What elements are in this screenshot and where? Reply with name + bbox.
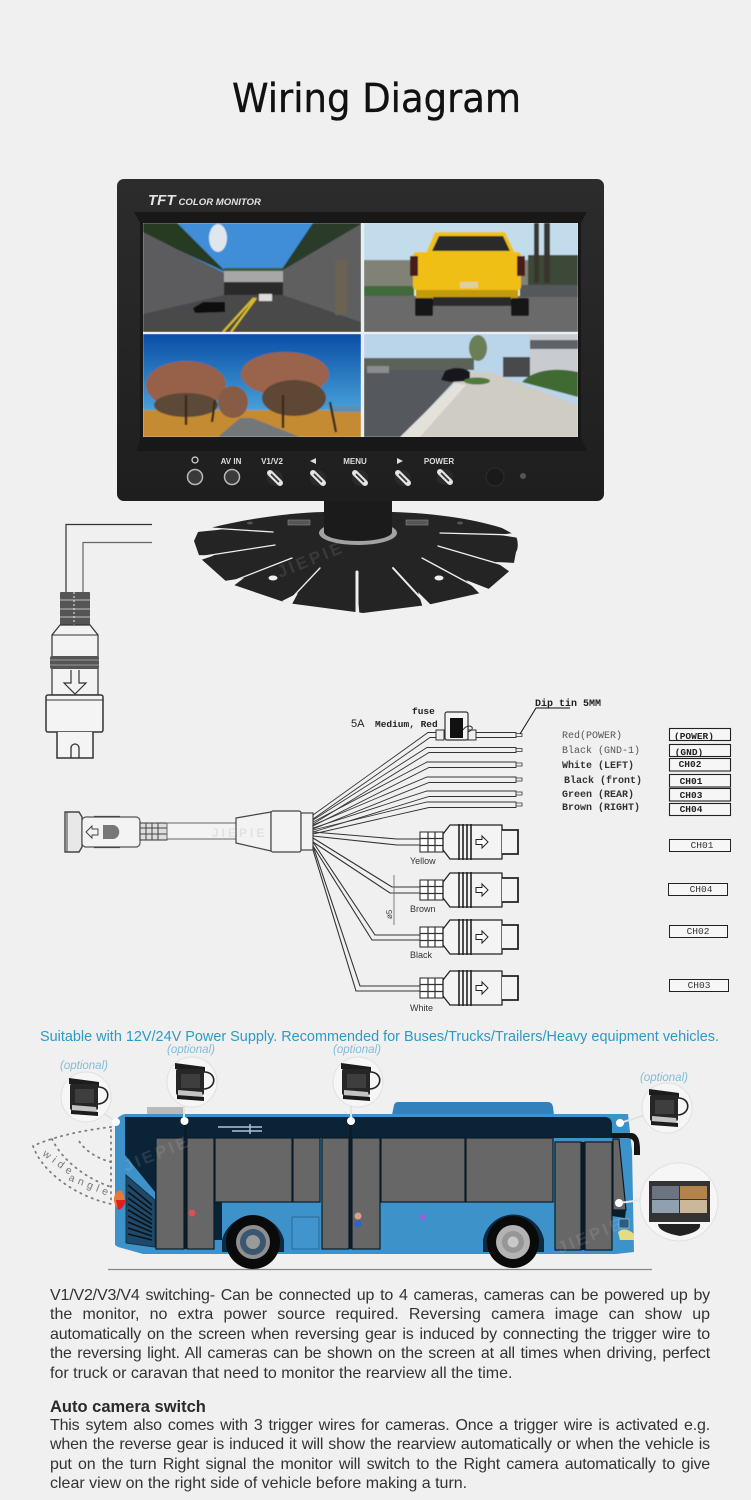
wire colour labels: Green (REAR) bbox=[562, 789, 634, 801]
rca connector brown bbox=[420, 872, 518, 908]
auto camera switch paragraph: when the reverse gear is induced it will show the rearview automatically or when the vehicle is bbox=[50, 1436, 710, 1453]
rca connector black bbox=[420, 919, 518, 955]
camera view: trees and road bbox=[143, 334, 361, 437]
description paragraph: the monitor, no extra power source required. Reversing camera image can show up bbox=[50, 1306, 710, 1323]
monitor buttons bbox=[188, 468, 526, 486]
wire colour labels: White (LEFT) bbox=[562, 760, 634, 772]
monitor bbox=[117, 179, 604, 501]
watermarks: JIEPIE bbox=[120, 1132, 193, 1176]
supply note: Suitable with 12V/24V Power Supply. Recommended for Buses/Trucks/Trailers/Heavy equipment vehicles. bbox=[40, 1029, 719, 1045]
channel table lower bbox=[668, 840, 730, 992]
camera callout side 2 bbox=[333, 1057, 383, 1125]
channel table upper: CH01 bbox=[680, 776, 703, 787]
button labels: MENU bbox=[343, 457, 367, 466]
channel table lower: CH01 bbox=[691, 840, 714, 851]
button labels: V1/V2 bbox=[261, 457, 283, 466]
watermarks bbox=[120, 538, 627, 1258]
camera view: yellow pickup bbox=[364, 223, 578, 332]
monitor brand label: TFT COLOR MONITOR bbox=[148, 192, 261, 209]
auto camera switch paragraph: clear view on the right side of vehicle before making a turn. bbox=[50, 1475, 467, 1492]
auto camera switch paragraph bbox=[50, 1417, 710, 1492]
channel table lower: CH02 bbox=[687, 926, 710, 937]
bus bbox=[114, 1102, 640, 1269]
channel table upper: (POWER) bbox=[674, 731, 714, 742]
channel table upper: (GND) bbox=[675, 747, 703, 758]
title: Wiring Diagram bbox=[232, 76, 521, 122]
rca labels: Yellow bbox=[410, 856, 436, 866]
fuse and tin labels: Medium, Red bbox=[375, 719, 438, 730]
description paragraph: automatically on the screen when reversing gear is induced by connecting the trigger wire to bbox=[50, 1326, 710, 1343]
monitor callout bbox=[615, 1163, 718, 1241]
rca connector white bbox=[420, 970, 518, 1006]
rear wheel bbox=[222, 1215, 284, 1269]
mirror bbox=[610, 1133, 640, 1155]
channel table upper: CH03 bbox=[680, 790, 703, 801]
fuse and tin labels: fuse bbox=[412, 706, 435, 717]
wire colour labels: Red(POWER) bbox=[562, 730, 622, 742]
wire colour labels: Brown (RIGHT) bbox=[562, 802, 640, 814]
optional labels bbox=[60, 1044, 688, 1084]
screen background bbox=[143, 223, 578, 437]
rca labels: Brown bbox=[410, 904, 436, 914]
rca labels: Black bbox=[410, 950, 433, 960]
roof logo bbox=[218, 1124, 262, 1134]
description paragraph: the reversing light. All cameras can be shown on the screen at all times when driving, perfect bbox=[50, 1345, 710, 1362]
camera callout side 1 bbox=[167, 1057, 217, 1125]
wide angle zone bbox=[33, 1127, 114, 1204]
channel table upper bbox=[670, 728, 730, 816]
camera view: street and sidewalk bbox=[364, 334, 578, 437]
camera callout left rear bbox=[61, 1072, 120, 1126]
description paragraph: V1/V2/V3/V4 switching- Can be connected up to 4 cameras, cameras can be powered up by bbox=[50, 1287, 710, 1304]
ground line bbox=[108, 1268, 652, 1270]
channel table lower: CH03 bbox=[688, 980, 711, 991]
channel table upper: CH02 bbox=[679, 759, 702, 770]
rca connector yellow bbox=[420, 824, 518, 860]
rca labels: White bbox=[410, 1003, 433, 1013]
optional labels: (optional) bbox=[640, 1072, 688, 1084]
wide angle label: wide bbox=[39, 1147, 78, 1180]
auto camera switch paragraph: This sytem also comes with 3 trigger wires for cameras. Once a trigger wire is activated e.g. bbox=[50, 1417, 710, 1434]
fuse holder bbox=[436, 708, 570, 740]
horizontal multi-pin connector bbox=[65, 811, 313, 852]
vertical connector bbox=[46, 524, 152, 758]
wire colour labels bbox=[562, 730, 642, 814]
channel table upper: CH04 bbox=[680, 804, 703, 815]
monitor stand and base bbox=[194, 500, 520, 615]
channel table lower: CH04 bbox=[690, 884, 713, 895]
button labels: AV IN bbox=[221, 457, 242, 466]
fuse and tin labels: Dip tin 5MM bbox=[535, 698, 601, 710]
diameter dimension bbox=[385, 875, 394, 925]
auto camera switch heading: Auto camera switch bbox=[50, 1398, 206, 1416]
optional labels: (optional) bbox=[333, 1044, 381, 1056]
auto camera switch paragraph: put on the turn Right signal the monitor will switch to the Right camera automatically to give bbox=[50, 1456, 710, 1473]
description paragraph: for truck or caravan that need to monitor the rearview all the time. bbox=[50, 1365, 512, 1382]
description paragraph bbox=[50, 1287, 710, 1382]
watermarks: JIEPIE bbox=[212, 826, 267, 840]
fuse and tin labels: 5A bbox=[351, 718, 365, 730]
button labels bbox=[192, 457, 454, 466]
front wheel bbox=[483, 1215, 544, 1268]
optional labels: (optional) bbox=[167, 1044, 215, 1056]
wide angle zone: angle bbox=[67, 1172, 114, 1200]
camera view: road under bridge bbox=[143, 223, 361, 332]
front detail bbox=[618, 1229, 634, 1240]
wire harness bbox=[313, 732, 522, 991]
wire colour labels: Black (GND-1) bbox=[562, 745, 640, 757]
camera callout front bbox=[616, 1083, 692, 1133]
watermarks: JIEPIE bbox=[554, 1214, 627, 1258]
diameter dimension: ø5 bbox=[385, 909, 394, 919]
optional labels: (optional) bbox=[60, 1060, 108, 1072]
windows and doors bbox=[156, 1138, 626, 1250]
wire colour labels: Black (front) bbox=[564, 775, 642, 787]
rca labels bbox=[410, 856, 436, 1013]
watermarks: JIEPIE bbox=[274, 538, 347, 582]
fuse and tin labels bbox=[351, 698, 601, 730]
button labels: POWER bbox=[424, 457, 454, 466]
